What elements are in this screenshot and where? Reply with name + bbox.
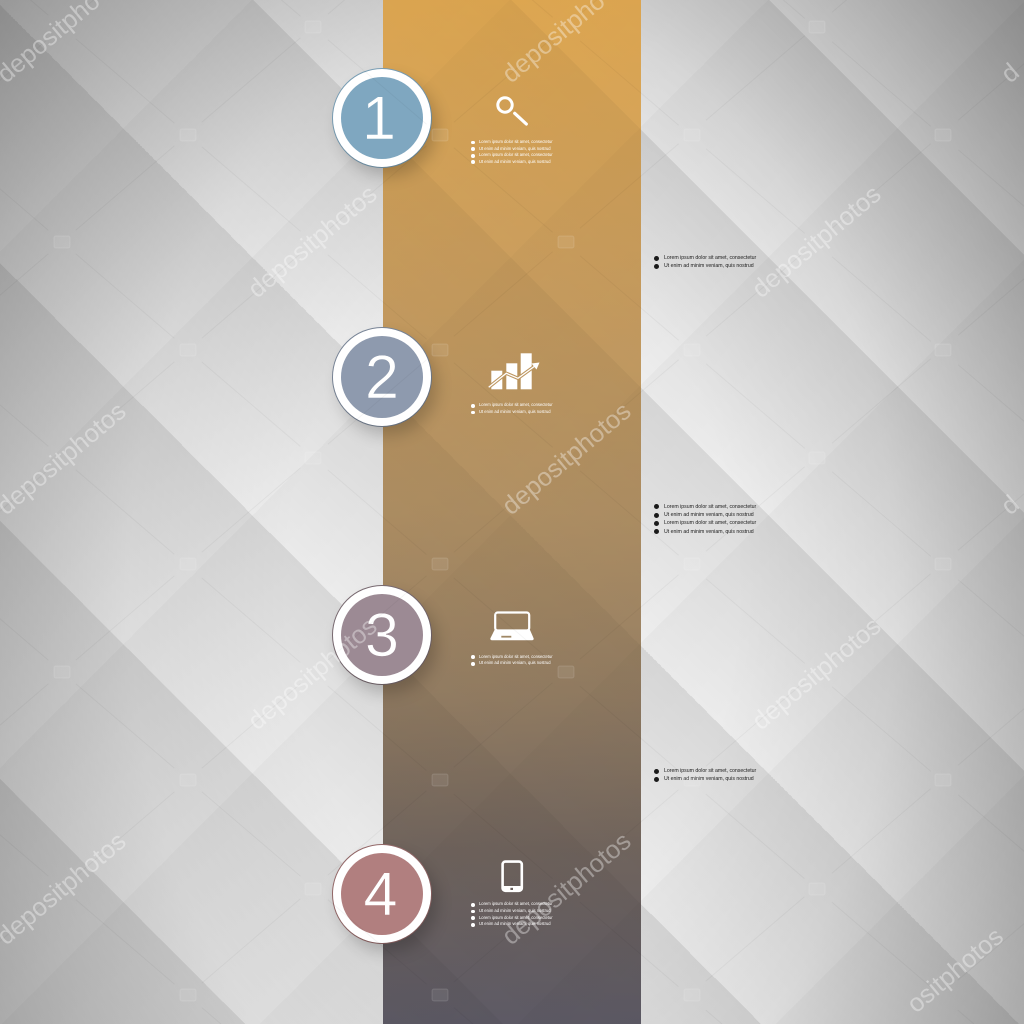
text block: right list 2: Ut enim ad minim veniam, quis nostrud	[664, 529, 754, 535]
text block: right list 3: Ut enim ad minim veniam, quis nostrud	[664, 776, 754, 782]
watermark text group: depositphotos	[243, 180, 383, 304]
text block: right list 1: Ut enim ad minim veniam, quis nostrud	[664, 263, 754, 269]
text block: step 1 list: Lorem ipsum dolor sit amet, consectetur	[479, 139, 553, 144]
watermark text group: depositphotos	[497, 827, 637, 951]
text block: right list 2: Ut enim ad minim veniam, quis nostrud	[664, 512, 754, 518]
step 2 badge	[333, 328, 431, 426]
text block: step 1 list: Lorem ipsum dolor sit amet, consectetur	[479, 152, 553, 157]
text block: right list 3: Lorem ipsum dolor sit amet, consectetur	[664, 768, 756, 774]
text block: step 4 list	[471, 901, 553, 927]
icon: magnifier	[498, 98, 526, 124]
text block: step 3 list	[471, 654, 553, 666]
text block: right list 3	[654, 768, 756, 782]
text block: step 4 list: Lorem ipsum dolor sit amet, consectetur	[479, 915, 553, 920]
watermark text group: depositphotos	[747, 180, 887, 304]
step 2 badge: 2	[365, 343, 399, 411]
text block: step 2 list	[471, 402, 553, 414]
step 4 badge: 4	[364, 860, 397, 928]
text block: right list 2: Lorem ipsum dolor sit amet, consectetur	[664, 520, 756, 526]
text block: step 1 list	[471, 139, 553, 164]
watermark text group: depositphotos	[497, 397, 637, 521]
step 3 badge: 3	[365, 601, 399, 669]
step 4 badge	[333, 845, 431, 943]
watermark text group: ositphotos	[902, 922, 1009, 1019]
text block: step 4 list: Lorem ipsum dolor sit amet, consectetur	[479, 901, 553, 906]
text block: right list 1: Lorem ipsum dolor sit amet, consectetur	[664, 255, 756, 261]
watermark text group: depositphotos	[243, 612, 383, 736]
watermark text group: d	[996, 58, 1024, 89]
text block: step 4 list: Ut enim ad minim veniam, quis nostrud	[479, 921, 551, 926]
text block: step 4 list: Ut enim ad minim veniam, quis nostrud	[479, 908, 551, 913]
watermark text group: d	[996, 490, 1024, 521]
step 3 badge	[333, 586, 431, 684]
text block: right list 2: Lorem ipsum dolor sit amet, consectetur	[664, 504, 756, 510]
step 1 badge	[333, 69, 431, 167]
icon: smartphone	[502, 862, 522, 891]
icon: laptop	[490, 612, 534, 640]
text block: right list 2	[654, 504, 756, 535]
icon: bar chart with arrow	[489, 353, 540, 389]
text block: right list 1	[654, 255, 756, 269]
step 1 badge: 1	[362, 84, 396, 152]
text block: step 1 list: Ut enim ad minim veniam, quis nostrud	[479, 146, 551, 151]
text block: step 2 list: Ut enim ad minim veniam, quis nostrud	[479, 409, 551, 414]
text block: step 3 list: Lorem ipsum dolor sit amet, consectetur	[479, 654, 553, 659]
text block: step 1 list: Ut enim ad minim veniam, quis nostrud	[479, 159, 551, 164]
watermark text group: depositphotos	[747, 612, 887, 736]
text block: step 2 list: Lorem ipsum dolor sit amet, consectetur	[479, 402, 553, 407]
text block: step 3 list: Ut enim ad minim veniam, quis nostrud	[479, 660, 551, 665]
